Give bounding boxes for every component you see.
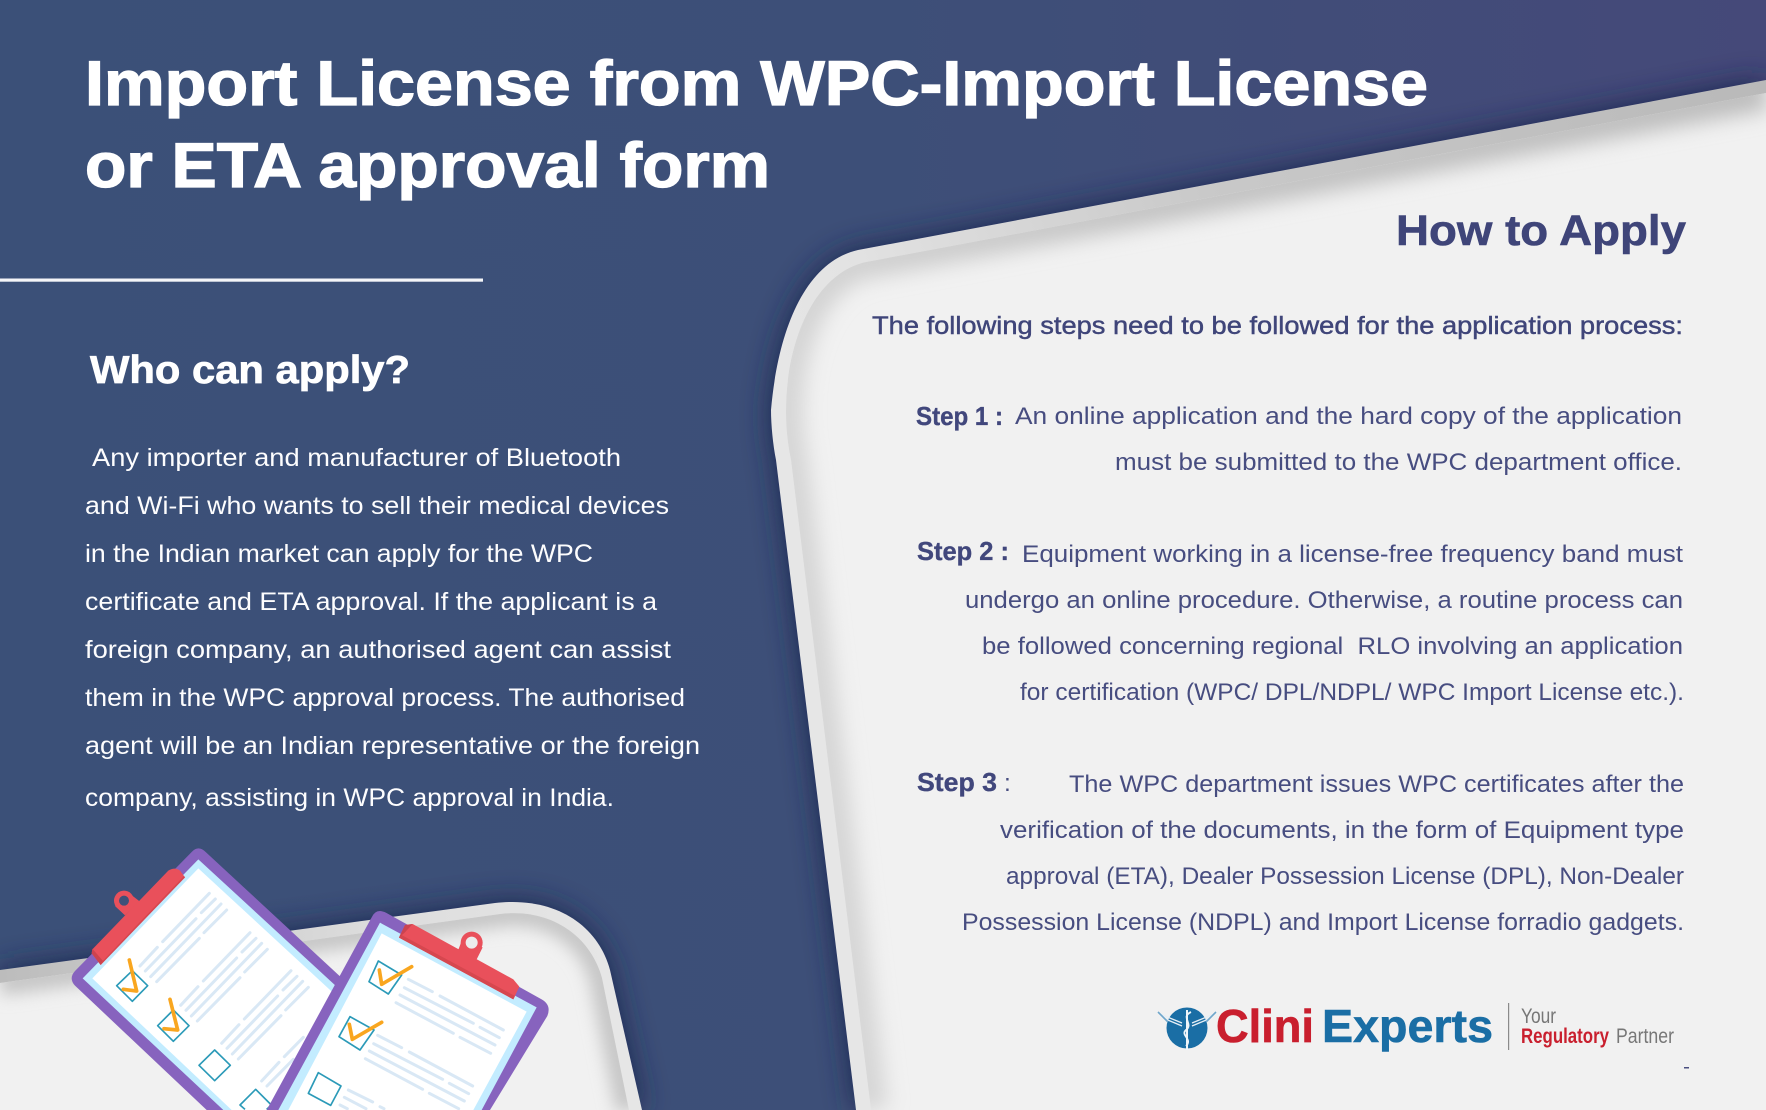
step 1: Step 1 : [916,401,1003,431]
step 3 [917,767,1684,936]
check marks [123,960,178,1030]
step 1: must be submitted to the WPC department office. [1115,449,1682,476]
step 1: An online application and the hard copy of the application [1015,403,1682,430]
step 2: undergo an online procedure. Otherwise, a routine process can [965,587,1683,614]
text block: who can apply: them in the WPC approval process. The authorised [85,684,685,712]
text block: who can apply: company, assisting in WPC approval in India. [85,784,614,812]
clip [399,924,519,999]
text block: who can apply: Any importer and manufacturer of Bluetooth [92,444,621,472]
text lines [140,893,308,1086]
step 1 [916,401,1682,476]
checkboxes [308,961,402,1105]
step 3: Possession License (NDPL) and Import License forradio gadgets. [962,909,1684,936]
panel: how to apply text [872,207,1686,936]
step 3: : [1004,770,1011,797]
step 2: Equipment working in a license-free frequency band must [1022,541,1683,568]
text block: who can apply: agent will be an Indian representative or the foreign [85,732,700,760]
wordmark: Clini [1216,1000,1314,1052]
step 2: Step 2 : [917,536,1009,566]
text block: who can apply: in the Indian market can apply for the WPC [85,540,593,568]
clip [92,869,185,965]
panel: how to apply card [771,80,1766,1110]
step 3: approval (ETA), Dealer Possession License (DPL), Non-Dealer [1006,863,1684,890]
paper edge [83,859,471,1110]
tagline: Regulatory [1521,1025,1609,1048]
checkboxes [117,971,271,1109]
text block: who can apply: foreign company, an authorised agent can assist [85,636,671,664]
title: or ETA approval form [85,131,770,201]
paper sheet [288,933,527,1110]
check marks [349,967,412,1039]
title [85,49,1428,201]
logo: CliniExperts: Experts [1322,1000,1493,1052]
clipboard board [267,911,549,1110]
panel: bottom left card [0,902,642,1110]
illustration: right clipboard [267,911,549,1110]
step 3: Step 3 [917,767,997,797]
tagline [1521,1005,1674,1048]
step 2: for certification (WPC/ DPL/NDPL/ WPC Import License etc.). [1020,679,1684,706]
panel: who can apply [85,349,700,812]
text lines [340,979,503,1109]
step 2 [917,536,1684,706]
logo: CliniExperts [1158,1000,1674,1052]
heading: who can apply: Who can apply? [90,349,410,392]
icon: caduceus emblem [1158,1008,1216,1050]
title: Import License from WPC-Import License [85,49,1428,119]
illustration: left clipboard [72,848,484,1110]
paper sheet [92,868,460,1110]
clipboard board [72,848,484,1110]
step 3: verification of the documents, in the form of Equipment type [1000,817,1684,844]
step 2: be followed concerning regional RLO involving an application [982,633,1683,660]
text block: who can apply [85,444,700,812]
paper edge [278,923,537,1110]
tagline: Partner [1616,1025,1674,1048]
text block: who can apply: and Wi-Fi who wants to sell their medical devices [85,492,669,520]
heading: how to apply: How to Apply [1396,207,1686,255]
text block: who can apply: certificate and ETA approval. If the applicant is a [85,588,657,616]
step 3: The WPC department issues WPC certificates after the [1069,771,1684,798]
intro sentence: The following steps need to be followed for the application process: [872,312,1683,340]
tagline: Your [1521,1005,1556,1028]
